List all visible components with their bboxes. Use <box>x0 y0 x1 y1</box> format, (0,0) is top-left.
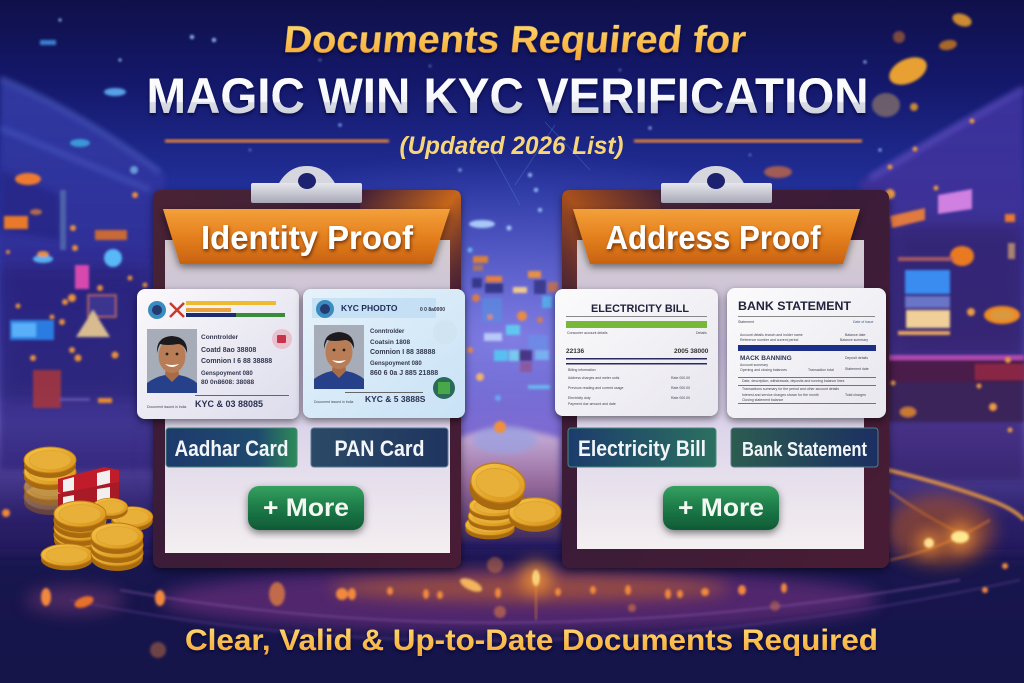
label: pan card: PAN Card <box>334 436 424 461</box>
id card: aadhar: Comnion I 6 88 38888 <box>201 358 272 365</box>
document: electricity bill: Details <box>696 331 707 335</box>
panel: address proof clipboard <box>555 166 889 568</box>
right wall sparks <box>885 118 1012 432</box>
document: bank statement: BANK STATEMENT <box>738 301 851 313</box>
button: more: + More <box>263 494 349 522</box>
stars <box>58 18 882 212</box>
right wall lights <box>764 11 1024 422</box>
id card: aadhar: Document issued in India <box>147 405 186 409</box>
id card: aadhar: Conntrolder <box>201 334 239 341</box>
floor sparks <box>2 509 1008 658</box>
clip <box>251 166 362 203</box>
title line 1: Documents Required for <box>282 19 748 61</box>
right wall <box>860 88 1024 480</box>
clipboard paper <box>165 240 450 553</box>
left wall <box>0 78 165 470</box>
document: electricity bill: Consumer account details <box>567 331 608 335</box>
clipboard paper <box>577 240 864 549</box>
icon: left coin pile with chips <box>24 447 153 571</box>
label: aadhar card: Aadhar Card <box>174 436 288 461</box>
document: electricity bill: 22136 <box>566 348 584 355</box>
label: aadhar card <box>166 428 297 467</box>
subtitle with rules: (Updated 2026 List) <box>400 132 624 160</box>
icon: center coin pile <box>465 459 561 539</box>
id card: aadhar <box>137 289 299 419</box>
id card: aadhar: 80 0n8608: 38088 <box>201 379 255 386</box>
clip <box>661 166 772 203</box>
document: bank statement: Opening and closing balances <box>740 368 787 372</box>
document: bank statement: Date of issue <box>853 320 873 324</box>
document: electricity bill: Rate 000.00 <box>671 376 690 380</box>
id card: pan: Document issued in India <box>314 400 353 404</box>
footer caption: Clear, Valid & Up-to-Date Documents Required <box>185 624 878 657</box>
document: electricity bill: Billing information <box>568 368 596 372</box>
left wall sparks <box>6 192 148 362</box>
document: bank statement: Date, description, withdrawals, deposits and running balance lines <box>742 379 845 383</box>
document: electricity bill: Address charges and meter units <box>568 376 620 380</box>
button: more <box>663 486 779 530</box>
document: electricity bill: Electricity duty <box>568 396 591 400</box>
id card: pan: KYC PHODTO <box>341 303 398 313</box>
document: electricity bill: Rate 000.00 <box>671 386 690 390</box>
hill <box>452 429 560 540</box>
id card: pan: KYC & 5 3888S <box>365 394 426 404</box>
heading banner: address proof <box>573 209 860 264</box>
center star <box>458 562 552 620</box>
heading banner: identity proof: Identity Proof <box>201 219 414 256</box>
document: bank statement <box>727 288 886 418</box>
id card: pan: 0 0 8a0000 <box>420 307 445 313</box>
document: bank statement: Transactions summary for the period and other account details <box>742 387 839 391</box>
button: more: + More <box>678 494 764 522</box>
document: electricity bill: Rate 000.00 <box>671 396 690 400</box>
id card: aadhar: KYC & 03 88085 <box>195 399 263 409</box>
document: bank statement: Account details branch and holder name <box>740 333 803 337</box>
id card: pan: Coatsin 1808 <box>370 339 410 346</box>
label: electricity bill <box>568 428 716 467</box>
document: bank statement: Deposit details <box>845 356 868 360</box>
id card: pan <box>303 289 465 418</box>
id card: pan: 860 6 0a J 885 21888 <box>370 370 438 377</box>
button: more <box>248 486 364 530</box>
document: bank statement: Transaction total <box>808 368 834 372</box>
document: bank statement: Reference number and current period <box>740 338 798 342</box>
center column lights <box>467 220 558 433</box>
document: electricity bill: 2005 38000 <box>674 348 709 355</box>
label: pan card <box>311 428 448 467</box>
clipboard board <box>153 190 461 568</box>
document: electricity bill: Previous reading and current usage <box>568 386 624 390</box>
id card: pan: Genspoyment 080 <box>370 361 422 367</box>
clipboard board <box>562 190 889 568</box>
document: electricity bill <box>555 289 718 416</box>
document: electricity bill: ELECTRICITY BILL <box>591 303 689 315</box>
id card: aadhar: Coatd 8ao 38808 <box>201 347 256 354</box>
heading banner: identity proof <box>163 209 450 264</box>
label: electricity bill: Electricity Bill <box>578 436 706 461</box>
document: bank statement: Balance date <box>845 333 865 337</box>
subtitle with rules <box>165 132 862 160</box>
label: bank statement: Bank Statement <box>742 439 867 461</box>
right floor glow <box>888 470 1024 520</box>
label: bank statement <box>731 428 878 467</box>
document: bank statement: Total charges <box>845 393 866 397</box>
panel: identity proof clipboard <box>137 166 465 568</box>
id card: pan: Conntrolder <box>370 329 405 335</box>
document: bank statement: Statement date <box>845 367 869 371</box>
document: bank statement: Statement <box>738 320 754 324</box>
heading banner: address proof: Address Proof <box>606 219 821 256</box>
id card: aadhar: Genspoyment 080 <box>201 371 253 377</box>
document: bank statement: Closing statement balance <box>742 398 783 402</box>
document: bank statement: Balance summary <box>840 338 868 342</box>
document: electricity bill: Payment due amount and date <box>568 402 616 406</box>
left wall lights <box>4 40 138 408</box>
document: bank statement: Interest and service charges shown for the month <box>742 393 819 397</box>
floor <box>0 555 1024 683</box>
id card: pan: Comnion I 88 38888 <box>370 349 435 356</box>
corner lights <box>918 523 974 554</box>
title line 2: MAGIC WIN KYC VERIFICATION <box>146 68 868 124</box>
document: bank statement: Account summary <box>740 363 768 367</box>
document: bank statement: MACK BANNING <box>740 355 792 362</box>
